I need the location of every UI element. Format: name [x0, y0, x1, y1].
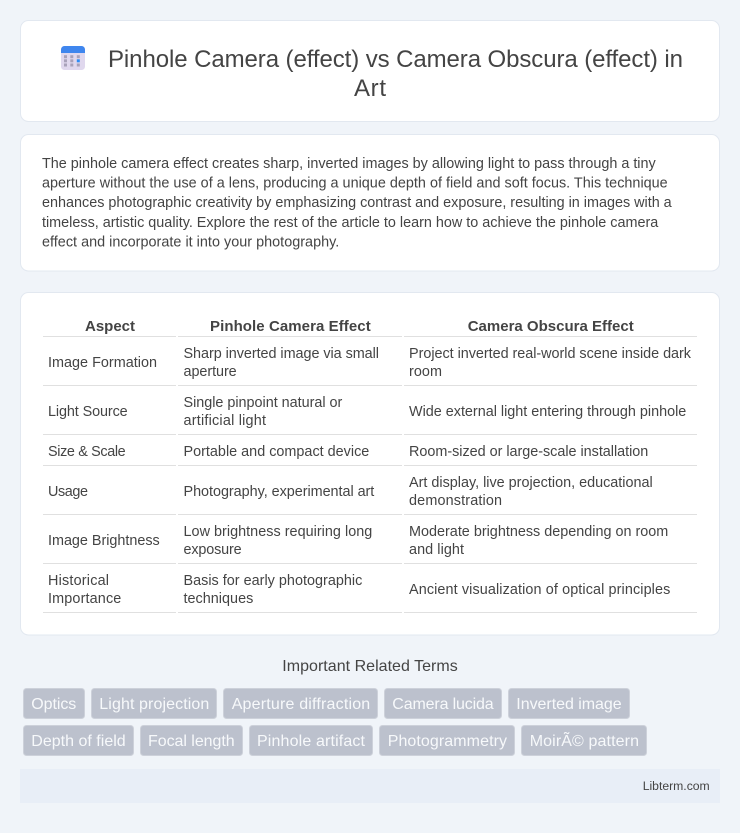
row: light source: Wide external light entering through pinhole [409, 404, 686, 420]
table header row: Camera Obscura Effect [468, 318, 634, 335]
text block: intro paragraph: The pinhole camera effect creates sharp, inverted images by allowing light to pass through a tiny [42, 156, 656, 172]
row: size and scale: Size & Scale [48, 444, 126, 460]
tag: moire pattern: MoirÃ© pattern [530, 730, 639, 750]
tag: optics: Optics [31, 696, 76, 713]
footer [20, 769, 720, 803]
row: historical importance: techniques [184, 591, 253, 607]
row: light source: Single pinpoint natural or [184, 395, 343, 411]
tag: optics [24, 688, 84, 718]
row: image brightness: and light [409, 542, 464, 558]
title [108, 46, 683, 102]
title: Art [354, 75, 386, 102]
text block: intro paragraph [42, 156, 672, 250]
row: image brightness: exposure [184, 542, 242, 558]
tag: inverted image: Inverted image [516, 696, 622, 713]
row: usage: demonstration [409, 493, 502, 509]
row: usage [43, 475, 697, 515]
footer: Libterm.com [643, 779, 710, 793]
text block: intro paragraph: enhances photographic creativity by emphasizing contrast and exposure, resulting in images with a [42, 195, 672, 211]
tag: photogrammetry: Photogrammetry [388, 733, 507, 750]
panel: comparison table [20, 292, 720, 635]
text block: intro paragraph: aperture without the use of a lens, producing a unique depth of field and soft focus. This technique [42, 176, 668, 192]
row: image brightness [43, 524, 697, 564]
panel: title header [20, 20, 720, 122]
tag: focal length: Focal length [148, 733, 235, 750]
tag: inverted image [508, 688, 630, 718]
table header row [43, 318, 697, 337]
tag: camera lucida: Camera lucida [392, 696, 494, 713]
tag: photogrammetry [380, 726, 514, 756]
tag: focal length [140, 726, 242, 756]
row: light source [43, 395, 697, 435]
row: image formation: Sharp inverted image via small [184, 346, 379, 362]
row: size and scale: Portable and compact device [184, 444, 369, 460]
tag: aperture diffraction [224, 688, 378, 718]
tag: aperture diffraction: Aperture diffraction [232, 696, 370, 713]
row: historical importance: Basis for early photographic [184, 573, 362, 589]
row: image brightness: Image Brightness [48, 533, 160, 549]
row: usage: Usage [48, 484, 88, 500]
row: light source: Light Source [48, 404, 128, 420]
table header row: Aspect [85, 318, 135, 335]
title: Pinhole Camera (effect) vs Camera Obscura (effect) in [108, 46, 683, 73]
row: size and scale: Room-sized or large-scale installation [409, 444, 648, 460]
tag: light projection [92, 688, 216, 718]
panel: intro description [20, 134, 720, 271]
tag: depth of field [24, 726, 134, 756]
row: size and scale [43, 444, 697, 466]
heading: important related terms: Important Related Terms [282, 658, 458, 675]
tag: camera lucida [384, 688, 502, 718]
tag: pinhole artifact [250, 726, 372, 756]
row: image brightness: Moderate brightness depending on room [409, 524, 668, 540]
row: historical importance: Importance [48, 591, 121, 607]
row: historical importance [43, 573, 697, 613]
row: image formation: Image Formation [48, 355, 157, 371]
icon: calendar [61, 46, 85, 70]
text block: intro paragraph: timeless, artistic quality. Explore the rest of the article to learn how to achieve the pinhole camera [42, 215, 658, 231]
tag: depth of field: Depth of field [31, 733, 126, 750]
table header row: Pinhole Camera Effect [210, 318, 371, 335]
row: image brightness: Low brightness requiring long [184, 524, 372, 540]
row: historical importance: Ancient visualization of optical principles [409, 582, 670, 598]
row: image formation: room [409, 364, 442, 380]
text block: intro paragraph: effect and incorporate it into your photography. [42, 234, 339, 250]
row: image formation: aperture [184, 364, 237, 380]
row: light source: artificial light [184, 413, 266, 429]
panel: related term tags [24, 688, 646, 756]
tag: light projection: Light projection [99, 696, 209, 713]
row: historical importance: Historical [48, 573, 109, 589]
row: image formation: Project inverted real-world scene inside dark [409, 346, 692, 362]
tag: pinhole artifact: Pinhole artifact [257, 733, 366, 750]
row: image formation [43, 346, 697, 386]
row: usage: Photography, experimental art [184, 484, 374, 500]
tag: moire pattern [522, 726, 646, 756]
row: usage: Art display, live projection, educational [409, 475, 653, 491]
